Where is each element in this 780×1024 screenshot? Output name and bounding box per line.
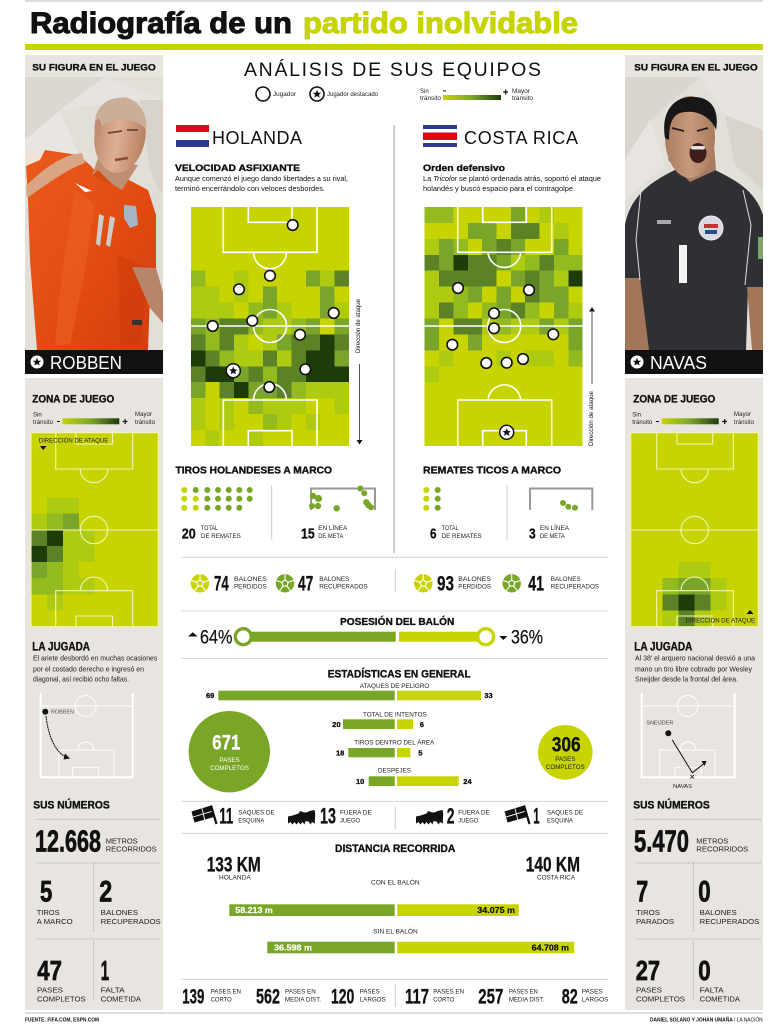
right column: sus numeros: 0: [698, 955, 711, 986]
stat bars: ataques de peligro: 69: [206, 691, 214, 700]
legend: Mayor: [734, 412, 751, 418]
stat bars: ataques de peligro: [206, 683, 493, 700]
team header: Holanda: [176, 125, 302, 148]
possession: [188, 615, 543, 649]
players: Costa Rica: [447, 283, 559, 439]
right column: la jugada: Al 38' el arquero nacional desvió a una: [635, 654, 756, 663]
distance covered: 133 KM: [207, 854, 261, 877]
top rule: [25, 0, 763, 2]
title: Radiografía de un: [30, 7, 292, 40]
bottom rule: [25, 1012, 763, 1014]
balls lost and recovered: [191, 570, 600, 596]
right column: sus numeros: METROS: [696, 836, 728, 845]
text block: Costa Rica analysis: holandés y buscó espacio para el contragolpe.: [423, 184, 575, 193]
corners and offsides: FUERA DE: [340, 810, 372, 817]
photo: Robben: [25, 77, 163, 350]
name bar: Navas: NAVAS: [650, 353, 707, 373]
stat bars: despejes: [356, 768, 472, 786]
stat bars: ataques de peligro: ATAQUES DE PELIGRO: [360, 683, 429, 690]
left column: la jugada: El ariete desbordó en muchas ocasiones: [33, 654, 158, 663]
pass types: 120: [331, 985, 354, 1008]
diagram: Navas play: [642, 693, 735, 790]
direction label: DIRECCIÓN DE ATAQUE: [686, 615, 755, 624]
pass types: PASES: [360, 988, 380, 995]
shots: Costa Rica: 3: [529, 525, 536, 542]
bars: sin el balon: 36.598 m: [274, 942, 312, 952]
distance covered: DISTANCIA RECORRIDA: [335, 843, 455, 855]
shots: Costa Rica: [423, 466, 592, 542]
general statistics: [189, 667, 593, 792]
stat bars: ataques de peligro: 33: [484, 691, 493, 700]
left column: la jugada: diagonal, así recibió ocho faltas.: [33, 674, 129, 683]
gap under name bars: [25, 374, 763, 378]
attack direction: Holanda: [355, 299, 362, 444]
right column: sus numeros: FALTA: [700, 986, 725, 995]
legend: tránsito: [33, 420, 54, 426]
right column: sus numeros: COMETIDA: [700, 995, 741, 1004]
pass types: 82: [562, 985, 578, 1008]
left column: sus numeros: PASES: [37, 986, 63, 995]
attack direction: Costa Rica: [588, 307, 595, 446]
circle: Holanda passes: 671: [212, 731, 241, 754]
icon: ball Holanda lost: [191, 574, 209, 592]
pass types: LARGOS: [582, 996, 609, 1003]
pass types: 139: [182, 985, 204, 1008]
stat bars: total de intentos: 6: [420, 720, 424, 729]
legend: transit gradient: tránsito: [512, 96, 534, 102]
left column: sus numeros: 1: [101, 955, 109, 986]
players: Holanda: [207, 220, 339, 392]
pass types: LARGOS: [360, 996, 386, 1003]
panel: left player column background: [25, 55, 163, 1010]
stat bars: tiros dentro del area: 5: [418, 748, 422, 758]
author credit: DANIEL SOLANO Y JOHAN UMAÑA / LA NACIÓN: [650, 1017, 763, 1024]
legend: tránsito: [135, 420, 156, 426]
text block: Holanda analysis: [175, 163, 348, 193]
diagram: Robben play: ROBBEN: [51, 710, 74, 716]
shots: Costa Rica: DE REMATES: [442, 533, 482, 540]
legend: Mayor: [135, 412, 152, 418]
heading: su figura left: SU FIGURA EN EL JUEGO: [32, 62, 156, 73]
right column: sus numeros: SUS NÚMEROS: [633, 798, 710, 811]
stat bars: total de intentos: 20: [332, 720, 341, 729]
left column: sus numeros: SUS NÚMEROS: [33, 798, 110, 811]
text block: Costa Rica analysis: Orden defensivo: [423, 163, 505, 174]
right column: sus numeros: BALONES: [700, 908, 737, 917]
left column: sus numeros: FALTA: [101, 986, 126, 995]
stat bars: despejes: 24: [463, 777, 472, 786]
shots: Costa Rica: DE META: [540, 533, 566, 540]
icon: corner flag: [192, 806, 216, 824]
source credit: FUENTE: FIFA.COM, ESPN.COM: [25, 1018, 99, 1024]
legend: transit gradient: Sin: [420, 89, 429, 95]
icon: ball Holanda recovered: [276, 574, 294, 592]
balls lost and recovered: 41: [528, 573, 544, 596]
balls lost and recovered: BALONES: [319, 576, 350, 583]
balls lost and recovered: PERDIDOS: [458, 583, 492, 590]
team header: Holanda: HOLANDA: [212, 128, 302, 148]
right column: sus numeros: RECUPERADOS: [700, 917, 759, 926]
left column: la jugada: [32, 640, 158, 777]
left column: sus numeros: A MARCO: [37, 917, 73, 926]
team header: Costa Rica: [423, 125, 578, 148]
diagram: Navas play: SNEIJDER: [646, 721, 673, 727]
direction label: DIRECCIÓN DE ATAQUE: [39, 436, 108, 445]
shots: Costa Rica: TOTAL: [442, 525, 459, 532]
shots: Costa Rica: 6: [430, 525, 436, 542]
title bar: [25, 44, 763, 50]
corners and offsides: FUERA DE: [458, 810, 490, 817]
title: partido inolvidable: [303, 7, 578, 40]
legend: +: [722, 416, 727, 426]
name bar: Robben: ROBBEN: [50, 353, 122, 373]
name bar: Navas: [625, 350, 763, 374]
distance covered: 140 KM: [526, 854, 580, 877]
shots: Costa Rica: EN LÍNEA: [540, 523, 570, 532]
right column: sus numeros: 0: [698, 876, 711, 909]
left column: zona de juego: [31, 394, 158, 627]
bars: con el balon: [229, 878, 519, 916]
bars: con el balon: 34.075 m: [477, 905, 515, 915]
distance covered: COSTA RICA: [537, 875, 576, 882]
pass types: [182, 984, 609, 1008]
legend: [33, 412, 156, 426]
pass types: 257: [478, 985, 503, 1008]
balls lost and recovered: RECUPERADOS: [551, 583, 600, 590]
right column: sus numeros: 7: [636, 876, 648, 909]
legend: players: Jugador: [273, 91, 296, 98]
icon: ball Costa Rica lost: [414, 574, 432, 592]
corners and offsides: JUEGO: [340, 818, 360, 825]
heading: analisis: ANÁLISIS DE SUS EQUIPOS: [244, 58, 541, 81]
corners and offsides: 11: [219, 803, 233, 828]
pass types: PASES EN: [509, 988, 538, 995]
pass types: PASES EN: [285, 988, 316, 995]
panel: right player column background: [625, 55, 763, 1010]
corners and offsides: 13: [320, 803, 336, 828]
circle: Holanda passes: [189, 711, 270, 792]
corners and offsides: JUEGO: [458, 818, 478, 825]
corners and offsides: SAQUES DE: [547, 810, 584, 817]
pass types: PASES: [582, 988, 603, 995]
shots: Costa Rica: REMATES TICOS A MARCO: [423, 466, 561, 477]
legend: [632, 412, 755, 426]
goal: Costa Rica: [530, 488, 592, 511]
legend: transit gradient: tránsito: [420, 96, 442, 102]
icon: ball Costa Rica recovered: [502, 574, 521, 592]
heat map: Costa Rica: [425, 207, 583, 446]
legend: players: [256, 87, 379, 101]
left column: sus numeros: [33, 798, 161, 1004]
shot dots: Holanda: [181, 487, 253, 511]
right column: sus numeros: RECORRIDOS: [696, 844, 748, 853]
right column: sus numeros: 27: [636, 955, 660, 986]
balls lost and recovered: 47: [298, 573, 313, 596]
right column: sus numeros: [633, 798, 761, 1004]
heat map: Holanda: [191, 207, 349, 446]
circle: Costa Rica passes: COMPLETOS: [546, 764, 585, 771]
right column: zona de juego: ZONA DE JUEGO: [633, 394, 716, 406]
shots: Holanda: [176, 466, 375, 542]
balls lost and recovered: BALONES: [551, 576, 581, 583]
left column: sus numeros: 12.668: [35, 824, 101, 859]
left column: sus numeros: RECUPERADOS: [101, 917, 161, 926]
legend: players: Jugador destacado: [327, 91, 379, 98]
circle: Costa Rica passes: PASES: [555, 756, 575, 763]
left column: la jugada: LA JUGADA: [32, 640, 90, 654]
text block: Costa Rica analysis: [423, 163, 601, 193]
circle: Costa Rica passes: 306: [552, 734, 581, 757]
legend: tránsito: [734, 420, 755, 426]
text block: Holanda analysis: VELOCIDAD ASFIXIANTE: [175, 163, 300, 174]
left column: sus numeros: METROS: [106, 836, 138, 845]
legend: Sin: [33, 413, 42, 419]
left column: sus numeros: BALONES: [101, 908, 138, 917]
diagram: Navas play: NAVAS: [673, 784, 692, 790]
direction label: [686, 610, 755, 624]
balls lost and recovered: BALONES: [234, 576, 267, 583]
stat bars: despejes: 10: [356, 777, 364, 786]
heat map: Robben: [31, 433, 158, 627]
legend: Sin: [632, 413, 641, 419]
shot dots: Costa Rica: [423, 487, 441, 511]
text block: Holanda analysis: Aunque comenzó el juego dando libertades a su rival,: [175, 174, 348, 183]
right column: la jugada: mano un tiro libre cobrado por Wesley: [635, 664, 752, 673]
legend: transit gradient: [420, 87, 534, 102]
corners and offsides: SAQUES DE: [238, 810, 275, 817]
bars: sin el balon: SIN EL BALÓN: [373, 927, 418, 936]
pass types: 117: [405, 985, 429, 1008]
pass types: PASES EN: [433, 988, 464, 995]
shots: Holanda: DE META: [318, 533, 344, 540]
balls lost and recovered: 93: [437, 573, 454, 596]
right column: zona de juego: [631, 394, 758, 627]
left column: sus numeros: COMETIDA: [101, 995, 142, 1004]
stat bars: despejes: DESPEJES: [378, 768, 412, 775]
pass types: 562: [256, 985, 280, 1008]
corners and offsides: ESQUINA: [547, 818, 574, 825]
shots: Holanda: TIROS HOLANDESES A MARCO: [176, 466, 332, 477]
title: [30, 7, 578, 40]
right column: la jugada: LA JUGADA: [634, 640, 693, 654]
photo: Navas: [625, 77, 763, 350]
attack direction: Costa Rica: Dirección de ataque: [588, 391, 595, 446]
icon: boot: [416, 810, 443, 824]
corners and offsides: [192, 803, 584, 829]
team header: Costa Rica: COSTA RICA: [464, 128, 578, 148]
left column: zona de juego: ZONA DE JUEGO: [32, 394, 115, 406]
left column: la jugada: por el costado derecho e ingresó en: [33, 664, 144, 673]
general statistics: ESTADÍSTICAS EN GENERAL: [328, 667, 471, 680]
bars: sin el balon: [267, 927, 574, 953]
circle: Holanda passes: COMPLETOS: [210, 765, 249, 772]
pass types: CORTO: [211, 996, 232, 1003]
stat bars: total de intentos: TOTAL DE INTENTOS: [363, 711, 427, 718]
bars: con el balon: CON EL BALÓN: [371, 878, 420, 887]
shots: Holanda: 20: [182, 525, 196, 542]
balls lost and recovered: PERDIDOS: [234, 583, 267, 590]
possession: 64%: [200, 627, 232, 649]
stat bars: tiros dentro del area: 18: [336, 748, 344, 758]
legend: +: [122, 416, 128, 426]
corners and offsides: 1: [533, 803, 540, 828]
shots: Holanda: EN LÍNEA: [318, 523, 348, 532]
left column: sus numeros: 47: [37, 955, 62, 986]
legend: transit gradient: +: [503, 87, 508, 97]
corners and offsides: ESQUINA: [238, 818, 265, 825]
attack direction: Holanda: Dirección de ataque: [355, 299, 362, 353]
pass types: MEDIA DIST.: [509, 996, 544, 1003]
balls lost and recovered: RECUPERADOS: [319, 583, 368, 590]
shots: Holanda: DE REMATES: [201, 533, 241, 540]
direction label: [39, 436, 108, 450]
left column: sus numeros: 2: [99, 876, 112, 909]
possession: POSESIÓN DEL BALÓN: [340, 615, 454, 628]
shots: Holanda: 15: [301, 525, 315, 542]
text block: Costa Rica analysis: La Tricolor se plantó ordenada atrás, soportó el ataque: [423, 174, 601, 183]
left column: sus numeros: COMPLETOS: [37, 995, 86, 1004]
distance covered: HOLANDA: [219, 875, 251, 882]
stat bars: tiros dentro del area: [336, 738, 435, 758]
possession: 36%: [511, 627, 543, 649]
bars: con el balon: 58.213 m: [235, 905, 273, 915]
corners and offsides: 2: [447, 803, 454, 828]
text block: Holanda analysis: terminó encerrándolo con veloces desbordes.: [175, 184, 325, 193]
shots: Holanda: TOTAL: [201, 525, 218, 532]
right column: sus numeros: TIROS: [636, 908, 660, 917]
circle: Costa Rica passes: [538, 725, 593, 780]
distance covered: [207, 843, 580, 953]
icon: boot: [288, 810, 315, 824]
heat map: Navas: [631, 433, 758, 627]
pass types: CORTO: [433, 996, 454, 1003]
stat bars: tiros dentro del area: TIROS DENTRO DEL ÁREA: [354, 738, 435, 747]
balls lost and recovered: BALONES: [458, 576, 492, 583]
heading: su figura right: SU FIGURA EN EL JUEGO: [634, 62, 758, 73]
right column: sus numeros: PARADOS: [636, 917, 674, 926]
right column: sus numeros: 5.470: [634, 824, 689, 859]
left column: sus numeros: TIROS: [37, 908, 60, 917]
right column: sus numeros: PASES: [636, 986, 662, 995]
left column: sus numeros: 5: [40, 876, 52, 909]
pass types: MEDIA DIST.: [285, 996, 321, 1003]
icon: corner flag: [504, 806, 530, 824]
center divider: [393, 125, 395, 553]
right column: sus numeros: COMPLETOS: [636, 995, 685, 1004]
right column: la jugada: Sneijder desde la frontal del área.: [635, 674, 738, 683]
goal: Holanda: [309, 486, 375, 511]
bars: sin el balon: 64.708 m: [532, 942, 569, 952]
right column: la jugada: [634, 640, 756, 790]
legend: tránsito: [632, 420, 653, 426]
name bar: Robben: [25, 350, 163, 374]
balls lost and recovered: 74: [214, 573, 229, 596]
pass types: PASES EN: [211, 988, 241, 995]
legend: transit gradient: Mayor: [512, 89, 530, 95]
circle: Holanda passes: PASES: [219, 757, 240, 764]
stat bars: total de intentos: [332, 711, 427, 729]
left column: sus numeros: RECORRIDOS: [106, 844, 157, 853]
